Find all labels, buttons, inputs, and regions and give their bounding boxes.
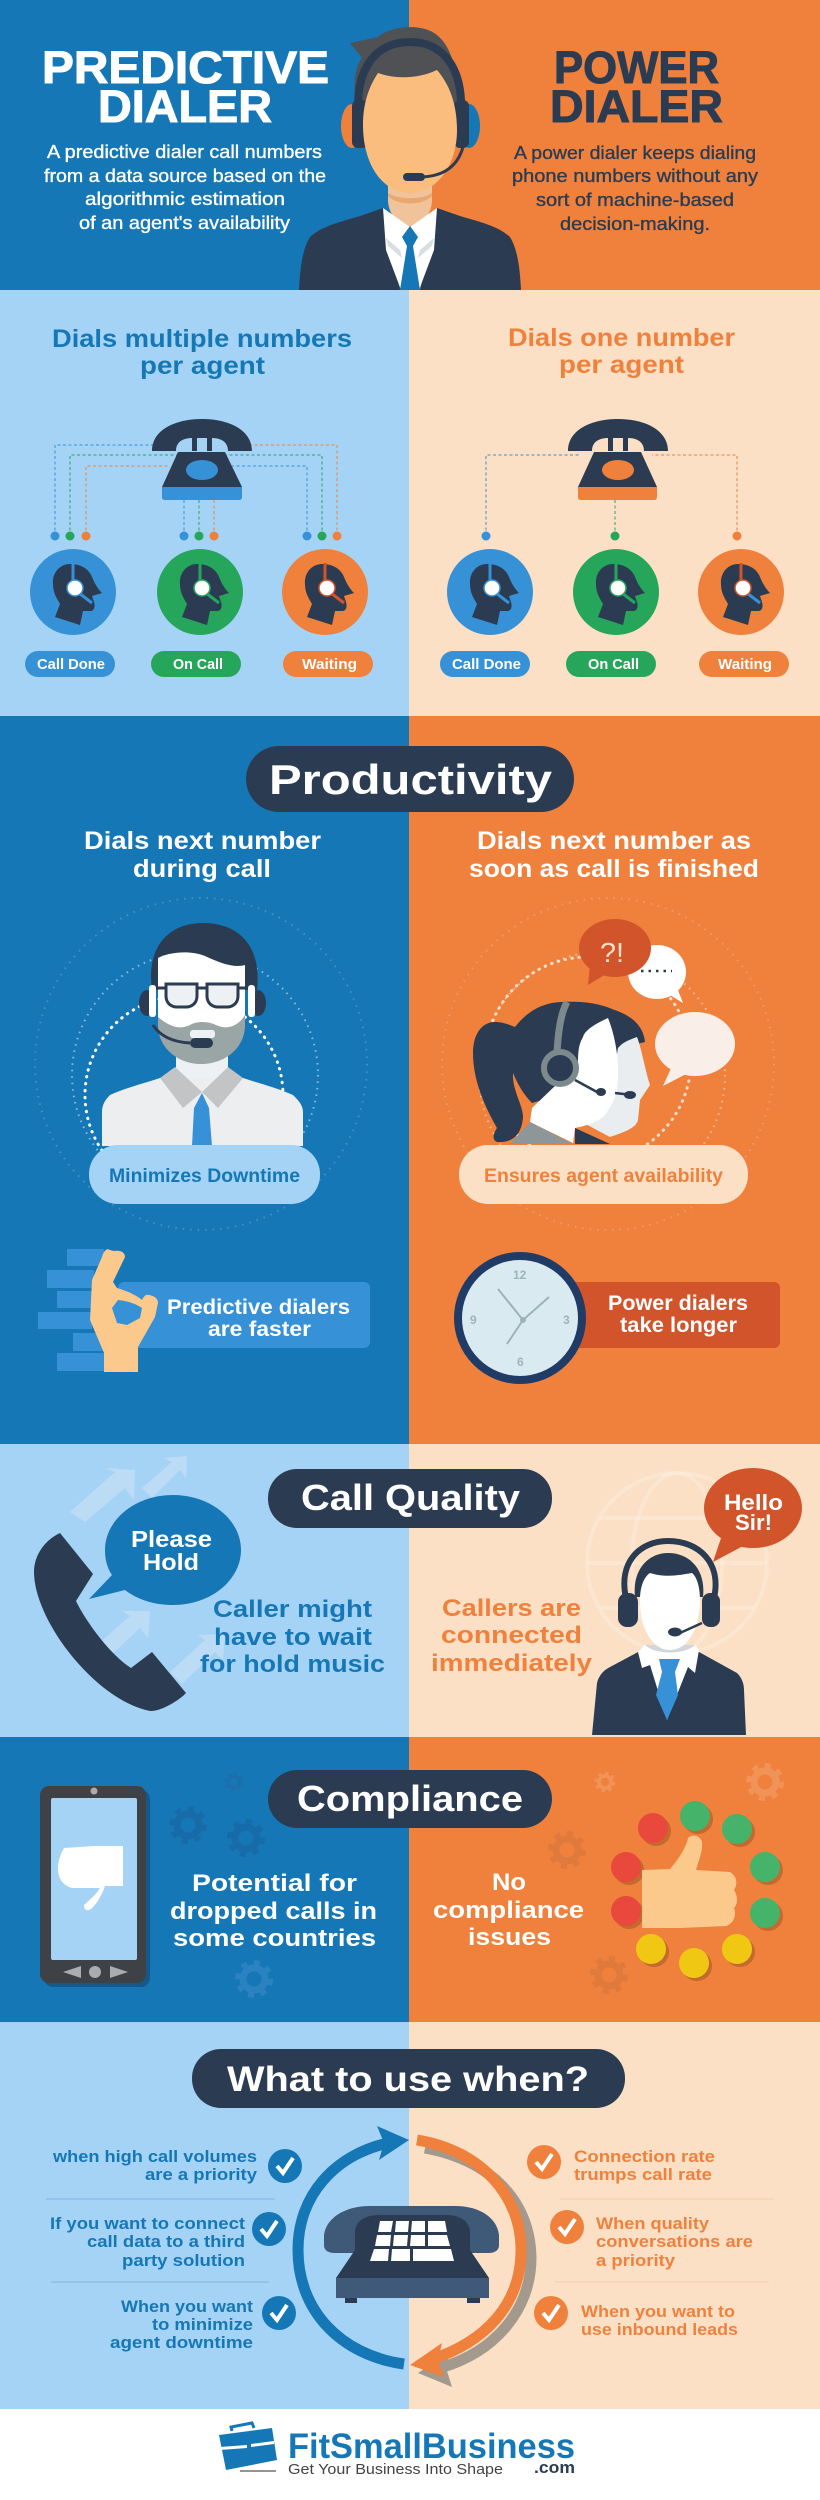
text: caller might have to wait: Caller might bbox=[213, 1596, 372, 1623]
heading: productivity pill: Productivity bbox=[269, 756, 553, 803]
bubble: hello sir: Hello bbox=[724, 1490, 783, 1515]
text: power dialer definition: phone numbers without any bbox=[512, 166, 758, 186]
decorative globe bbox=[587, 1473, 767, 1653]
callout: power dialers take longer: 6 bbox=[517, 1355, 524, 1369]
callout: predictive dialers are faster: Predictive dialers bbox=[167, 1296, 350, 1319]
panel: compliance bbox=[0, 1737, 820, 2022]
heading: dials multiple numbers: Dials multiple numbers bbox=[52, 325, 352, 353]
title: power dialer bbox=[550, 42, 723, 132]
icon: support agent bbox=[592, 1541, 746, 1735]
callout: power dialers take longer: 12 bbox=[513, 1268, 527, 1282]
heading: dials next number after call: soon as call is finished bbox=[469, 855, 759, 883]
dotted rings left bbox=[35, 898, 367, 1230]
callout: predictive dialers are faster bbox=[38, 1249, 370, 1372]
logo text: Get Your Business Into Shape bbox=[288, 2461, 503, 2478]
icon: telephone blue bbox=[152, 419, 252, 500]
text: no compliance issues: No bbox=[492, 1869, 526, 1896]
list item: quality conversations: conversations are bbox=[596, 2233, 753, 2251]
icon: briefcase bbox=[219, 2423, 277, 2471]
heading: productivity pill bbox=[246, 746, 574, 812]
text: callers are connected: connected bbox=[441, 1622, 582, 1649]
icon: telephone orange bbox=[568, 419, 668, 500]
list item: quality conversations: a priority bbox=[596, 2252, 676, 2270]
heading: what to use when pill: What to use when? bbox=[227, 2060, 589, 2099]
arrow: orange cycle bbox=[410, 2140, 531, 2387]
status labels right bbox=[440, 651, 789, 677]
list item: connection rate: trumps call rate bbox=[574, 2166, 712, 2184]
label: ensures agent availability bbox=[459, 1145, 748, 1204]
text: potential for dropped calls: dropped calls in bbox=[170, 1898, 377, 1925]
title: power dialer: POWER bbox=[554, 42, 719, 93]
status labels right: Waiting bbox=[718, 656, 772, 673]
bubble: hello sir bbox=[704, 1468, 802, 1562]
bubble: please hold: Hold bbox=[143, 1549, 199, 1575]
title: predictive dialer: PREDICTIVE bbox=[42, 42, 329, 93]
callout: power dialers take longer: 3 bbox=[563, 1313, 570, 1327]
icon: agent on call right bbox=[573, 549, 659, 635]
panel: productivity bbox=[0, 716, 820, 1444]
heading: dials next number during call: Dials next number bbox=[84, 827, 321, 855]
icon: agent on call bbox=[157, 549, 243, 635]
icon: thumbs up with colored dots bbox=[611, 1801, 783, 1981]
heading: dials next number during call bbox=[84, 827, 321, 883]
icon: phone handset bbox=[34, 1533, 186, 1711]
callout: power dialers take longer: Power dialers bbox=[608, 1292, 748, 1315]
label: minimizes downtime bbox=[89, 1145, 320, 1204]
list item: connect call data: call data to a third bbox=[87, 2233, 245, 2251]
heading: dials next number during call: during call bbox=[133, 855, 271, 883]
heading: dials next number after call: Dials next number as bbox=[477, 827, 751, 855]
panel: dialing patterns bbox=[0, 290, 820, 716]
text: predictive dialer definition: A predictive dialer call numbers bbox=[47, 142, 322, 162]
text: potential for dropped calls: some countries bbox=[173, 1925, 376, 1952]
heading: dials multiple numbers bbox=[52, 325, 352, 380]
list item: minimize downtime: When you want bbox=[121, 2298, 254, 2316]
heading: dials one number: per agent bbox=[559, 351, 685, 379]
icon: speech bubbles bbox=[579, 919, 735, 1086]
callout: power dialers take longer: take longer bbox=[620, 1314, 737, 1337]
list item: high call volumes bbox=[52, 2148, 302, 2184]
callout: power dialers take longer bbox=[458, 1256, 780, 1380]
heading: dials next number after call bbox=[469, 827, 759, 883]
title: power dialer: DIALER bbox=[550, 81, 723, 132]
status labels left: On Call bbox=[173, 656, 223, 673]
bubble: please hold bbox=[89, 1495, 241, 1605]
logo text: .com bbox=[534, 2458, 575, 2477]
panel: header bbox=[0, 0, 820, 290]
text: predictive dialer definition bbox=[44, 142, 326, 233]
heading: dials multiple numbers: per agent bbox=[140, 352, 266, 380]
diagram: single connections bbox=[486, 455, 737, 536]
connector dots bbox=[50, 532, 742, 540]
dividers bbox=[46, 2199, 774, 2282]
status labels left bbox=[25, 651, 373, 677]
decorative arrows bbox=[70, 1456, 225, 1684]
heading: call quality pill bbox=[268, 1469, 552, 1528]
title: predictive dialer: DIALER bbox=[98, 81, 272, 132]
status labels left: Call Done bbox=[37, 656, 105, 673]
callout: power dialers take longer: 9 bbox=[470, 1313, 477, 1327]
icon: agent with headset bbox=[299, 27, 521, 290]
bubble: please hold: Please bbox=[131, 1526, 212, 1552]
heading: compliance pill bbox=[268, 1770, 552, 1828]
panel: call quality bbox=[0, 1444, 820, 1737]
text: caller might have to wait bbox=[200, 1596, 385, 1678]
title: predictive dialer bbox=[42, 42, 329, 132]
list item: connect call data bbox=[50, 2212, 286, 2270]
list item: inbound leads: When you want to bbox=[581, 2303, 735, 2321]
text: caller might have to wait: for hold music bbox=[200, 1651, 385, 1678]
text: potential for dropped calls: Potential for bbox=[192, 1870, 357, 1897]
text: predictive dialer definition: from a data source based on the bbox=[44, 166, 326, 186]
text: callers are connected: Callers are bbox=[442, 1595, 581, 1622]
heading: dials one number bbox=[508, 324, 735, 379]
list item: high call volumes: are a priority bbox=[145, 2166, 258, 2184]
list item: inbound leads: use inbound leads bbox=[581, 2321, 738, 2339]
list item: connection rate bbox=[527, 2145, 715, 2184]
heading: dials one number: Dials one number bbox=[508, 324, 735, 352]
list item: minimize downtime: agent downtime bbox=[110, 2334, 253, 2352]
arrow: blue cycle bbox=[298, 2126, 409, 2364]
heading: compliance pill: Compliance bbox=[297, 1778, 523, 1819]
icon: smartphone with thumb down bbox=[40, 1786, 150, 1987]
panel: what to use when bbox=[0, 2022, 820, 2409]
panel: footer logo bbox=[0, 2409, 820, 2500]
list item: quality conversations: When quality bbox=[596, 2215, 710, 2233]
text: power dialer definition bbox=[512, 143, 758, 234]
heading: call quality pill: Call Quality bbox=[301, 1477, 520, 1518]
text: no compliance issues: compliance bbox=[433, 1897, 584, 1924]
callout: predictive dialers are faster: are faster bbox=[208, 1318, 311, 1341]
list item: minimize downtime: to minimize bbox=[152, 2316, 253, 2334]
label: minimizes downtime: Minimizes Downtime bbox=[109, 1166, 300, 1187]
text: power dialer definition: sort of machine-based bbox=[536, 190, 734, 210]
icon: two agent profiles bbox=[473, 1002, 650, 1144]
list item: connect call data: If you want to connect bbox=[50, 2215, 246, 2233]
list item: high call volumes: when high call volumes bbox=[52, 2148, 257, 2166]
label: ensures agent availability: Ensures agent availability bbox=[484, 1166, 723, 1187]
list item: connection rate: Connection rate bbox=[574, 2148, 715, 2166]
icon: agent waiting right bbox=[698, 549, 784, 635]
text: caller might have to wait: have to wait bbox=[214, 1624, 372, 1651]
icon: central telephone bbox=[324, 2206, 499, 2303]
text: predictive dialer definition: of an agent's availability bbox=[79, 213, 290, 233]
icon: man with glasses and headset bbox=[102, 923, 303, 1146]
bubble: hello sir: Sir! bbox=[735, 1510, 772, 1535]
text: callers are connected bbox=[431, 1595, 593, 1677]
heading: what to use when pill bbox=[192, 2049, 625, 2108]
status labels right: Call Done bbox=[452, 656, 521, 673]
list item: quality conversations bbox=[550, 2210, 753, 2270]
icon: agent waiting bbox=[282, 549, 368, 635]
status labels right: On Call bbox=[588, 656, 639, 673]
text: potential for dropped calls bbox=[170, 1870, 377, 1952]
text: power dialer definition: A power dialer keeps dialing bbox=[514, 143, 756, 163]
text: callers are connected: immediately bbox=[431, 1650, 593, 1677]
status labels left: Waiting bbox=[302, 656, 357, 673]
logo text: FitSmallBusiness bbox=[288, 2427, 575, 2466]
list item: connect call data: party solution bbox=[122, 2252, 245, 2270]
text: no compliance issues bbox=[433, 1869, 584, 1951]
list item: inbound leads bbox=[534, 2296, 738, 2339]
text: no compliance issues: issues bbox=[468, 1924, 551, 1951]
icon: agent call done right bbox=[447, 549, 533, 635]
text: predictive dialer definition: algorithmic estimation bbox=[85, 189, 285, 209]
dotted rings right bbox=[442, 898, 774, 1230]
icon: agent call done bbox=[30, 549, 116, 635]
icon: speech bubbles: ?! bbox=[600, 937, 624, 968]
decorative gears bbox=[172, 1766, 781, 1995]
text: power dialer definition: decision-making. bbox=[560, 214, 710, 234]
list item: minimize downtime bbox=[110, 2296, 296, 2352]
diagram: multiple connections bbox=[55, 445, 337, 536]
